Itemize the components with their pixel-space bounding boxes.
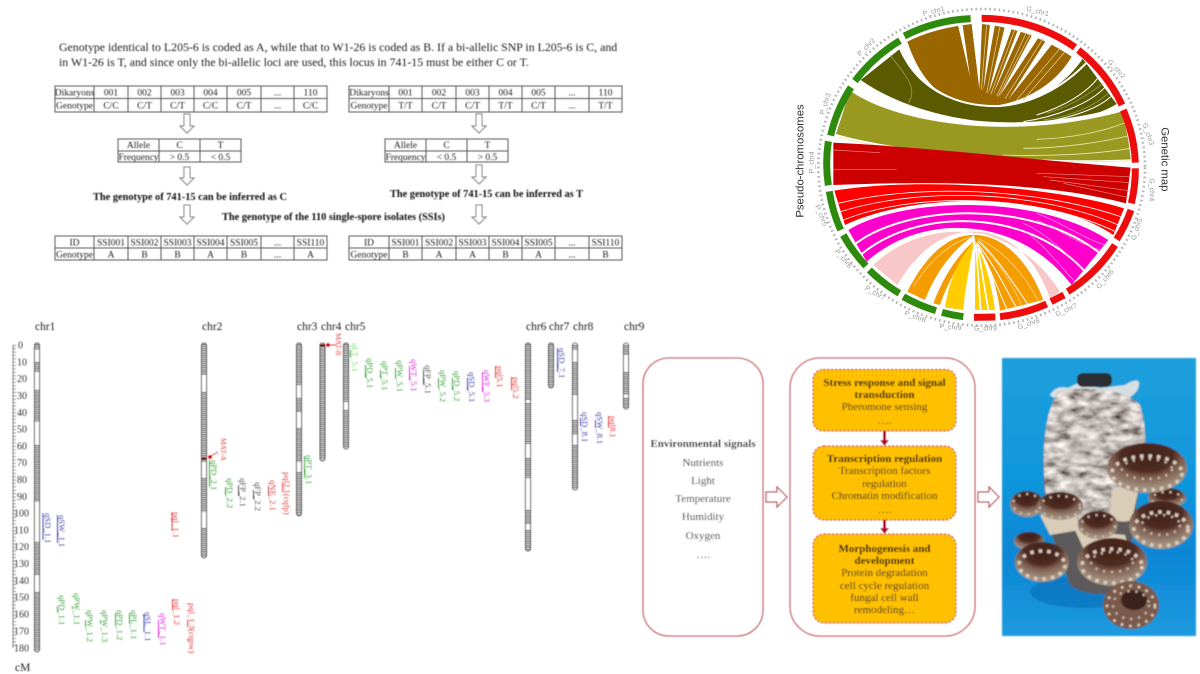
QTL labels: chr5 — [350, 343, 521, 402]
arrow: left step 2 — [180, 167, 194, 185]
arrow: right step 2 — [472, 165, 486, 184]
table: left SSI genotypes: SSI001 — [97, 238, 125, 248]
labels: pseudo-chromosome names: P_chr1 — [922, 6, 945, 18]
table: right dikaryon genotypes: 005 — [531, 88, 546, 98]
QTL labels: chr5: qSD_5.1 — [467, 372, 477, 402]
table: left dikaryon genotypes: ... — [274, 88, 281, 98]
labels: genetic map names: G_chr7 — [1055, 303, 1079, 318]
photo: plastic wrap — [1050, 381, 1139, 402]
panel: environmental signals — [643, 358, 763, 636]
axis: centimorgan scale: 10 — [17, 358, 27, 368]
chromosome labels: chr1 — [35, 321, 56, 333]
table: left allele frequency: Frequency — [118, 153, 159, 163]
photo: floor shadow — [1030, 576, 1140, 608]
QTL labels: chr1 — [43, 512, 197, 653]
chromosome: chr1 — [34, 343, 40, 652]
table: right SSI genotypes: A — [469, 250, 476, 260]
table: right SSI genotypes: SSI004 — [492, 238, 520, 248]
table: left SSI genotypes: A — [307, 250, 314, 260]
QTL labels: chr7 to chr9: qSD_8.1 — [580, 412, 590, 442]
box: transcription regulation — [813, 446, 956, 520]
QTL labels: chr7 to chr9: qSW_8.1 — [595, 412, 605, 444]
table: left SSI genotypes: SSI005 — [230, 238, 258, 248]
table: right SSI genotypes: SSI110 — [592, 238, 620, 248]
panel: environmental signals: Temperature — [675, 493, 731, 505]
QTL labels: chr5: qPT_5.1 — [380, 361, 390, 390]
QTL labels: chr5: pql5.1 — [495, 366, 505, 388]
panel: regulation model — [643, 358, 999, 636]
chromosome labels — [35, 321, 645, 333]
table: left dikaryon genotypes: 005 — [237, 88, 251, 98]
ribbon: chr9 — [945, 243, 995, 310]
QTL labels: chr1: qPD_1.1 — [57, 595, 67, 625]
box: transcription regulation: …. — [878, 504, 892, 516]
ribbon: chr2 — [861, 49, 1117, 127]
photo: large mushroom left — [1015, 542, 1069, 582]
heading: left inference: The genotype of 741-15 can be inferred as C — [93, 192, 287, 203]
axis: centimorgan scale: 150 — [14, 592, 29, 604]
QTL labels: chr1: qPW_1.1 — [72, 593, 82, 625]
box: morphogenesis: cell cycle regulation — [840, 580, 930, 592]
QTL labels: chr1: qSW_1.1 — [57, 515, 67, 547]
chromosome labels: chr8 — [573, 321, 594, 333]
arrow: left step 3 — [180, 205, 194, 224]
table: left dikaryon genotypes: Dikaryons — [55, 88, 95, 98]
QTL labels: chr2 and chr3: qNE_2.1 — [268, 480, 278, 511]
arrow: left step 1 — [180, 114, 194, 133]
table: right dikaryon genotypes: ... — [568, 102, 576, 112]
chromosome: chr5 — [344, 343, 348, 449]
intro text: Genotype identical to L205-6 is coded as A, while that to W1-26 is coded as B. If a bi-allelic SNP in L205-6 is C, and — [59, 40, 617, 54]
chromosome: chr7 — [548, 343, 554, 388]
table: right SSI genotypes: SSI001 — [392, 238, 420, 248]
chart: QTL linkage map — [13, 321, 645, 674]
chromosome labels: chr3 — [297, 321, 318, 333]
ribbon: chr4 — [833, 143, 1131, 203]
axis: centimorgan scale: 0 — [18, 340, 23, 352]
labels: pseudo-chromosome names: P_chr9 — [939, 323, 962, 332]
axis: centimorgan scale: 100 — [14, 508, 29, 520]
table: left dikaryon genotypes: C/C — [103, 102, 119, 112]
QTL labels: chr5: qLT_5.1 — [350, 343, 360, 372]
axis: centimorgan scale: 90 — [17, 492, 27, 503]
chromosome labels: chr4 — [321, 321, 342, 333]
table: left allele frequency: Allele — [127, 141, 150, 151]
labels: pseudo-chromosome names: P_chr5 — [813, 204, 828, 227]
QTL labels: chr1: pql_1.1 — [171, 512, 181, 538]
chart: circos plot of pseudo-chromosomes and genetic map — [794, 6, 1170, 333]
QTL labels: chr2 and chr3: qPT_3.1 — [304, 455, 314, 484]
table: right SSI genotypes: B — [602, 250, 609, 260]
axis: centimorgan scale: 80 — [17, 475, 27, 486]
axis label: pseudo-chromosomes: Pseudo-chromosomes — [794, 104, 806, 218]
photo: substrate bag — [1043, 389, 1145, 594]
box: morphogenesis: Morphogenesis and — [838, 543, 930, 555]
labels: genetic map names: G_chr2 — [1106, 59, 1126, 80]
QTL labels: chr5: qWF_5.3 — [482, 370, 492, 402]
box: stress response — [813, 370, 956, 431]
axis: centimorgan scale: 160 — [14, 610, 29, 620]
QTL labels: chr7 to chr9: pql8.1 — [608, 416, 618, 438]
QTL labels: chr2 and chr3: MAT-B — [334, 333, 343, 356]
box: transcription regulation: Transcription factors — [839, 465, 930, 477]
QTL labels: chr1: qPL_1.1 — [129, 610, 139, 639]
ring: tick marks — [818, 9, 1145, 326]
table: right SSI genotypes — [349, 236, 622, 260]
arrow: right step 3 — [472, 205, 486, 224]
table: right dikaryon genotypes: T/T — [598, 102, 613, 112]
table: right SSI genotypes: B — [402, 250, 409, 260]
table: left allele frequency: < 0.5 — [211, 153, 231, 163]
QTL labels: chr5: qPW_5.2 — [438, 370, 448, 402]
table: right SSI genotypes: ID — [364, 238, 374, 248]
table: right SSI genotypes: SSI003 — [459, 238, 487, 248]
table: right allele frequency: > 0.5 — [478, 153, 498, 163]
QTL labels: chr5: qFP_5.1 — [423, 365, 433, 394]
panel: environmental signals: Environmental signals — [650, 438, 756, 450]
table: left SSI genotypes: A — [207, 250, 214, 260]
arrow: transcription to morphogenesis — [880, 520, 889, 534]
photo: large mushroom right — [1129, 501, 1193, 549]
QTL labels: chr2 and chr3 — [208, 333, 343, 515]
QTL labels: chr5: pql5.2 — [511, 377, 521, 399]
chromosome labels: chr5 — [345, 321, 366, 333]
intro text — [59, 40, 617, 69]
table: right dikaryon genotypes: C/T — [465, 102, 480, 112]
labels: pseudo-chromosome names: P_chr3 — [819, 92, 833, 116]
panel: regulation cascade — [790, 358, 975, 636]
photo: mushroom stems — [1040, 485, 1138, 552]
chromosome: chr4 — [320, 343, 325, 461]
labels: pseudo-chromosome names: P_chr7 — [863, 285, 886, 302]
labels: pseudo-chromosome names — [809, 6, 962, 332]
arrow: regulation to fruiting body — [978, 487, 999, 507]
table: left dikaryon genotypes: 002 — [137, 88, 152, 98]
table: left SSI genotypes — [55, 236, 327, 260]
axis: centimorgan scale: 50 — [17, 424, 27, 436]
table: right SSI genotypes: SSI005 — [525, 238, 553, 248]
heading: right inference: The genotype of 741-15 can be inferred as T — [390, 189, 583, 200]
QTL labels: chr5: qPW_5.1 — [395, 360, 405, 392]
panel: genotype inference workflow — [55, 40, 622, 260]
table: left dikaryon genotypes: C/T — [170, 102, 185, 112]
ribbon: chr6 — [848, 205, 1108, 285]
axis: centimorgan scale: 170 — [14, 626, 29, 638]
table: right SSI genotypes: ... — [568, 250, 576, 260]
table: left allele frequency — [118, 139, 241, 163]
table: right dikaryon genotypes: 003 — [465, 88, 480, 98]
QTL labels: chr2 and chr3: qPD_2.1 — [209, 460, 219, 490]
table: right allele frequency: C — [443, 141, 450, 151]
chromosome: chr3 — [296, 343, 302, 516]
labels: pseudo-chromosome names: P_chr8 — [903, 310, 927, 324]
table: left SSI genotypes: SSI004 — [197, 238, 225, 248]
table: right allele frequency — [385, 139, 508, 163]
chromosome: chr2 — [202, 343, 206, 558]
table: right dikaryon genotypes: C/T — [432, 102, 447, 112]
arrow: signals to regulation — [766, 487, 787, 507]
QTL labels: chr5: qPD_5.2 — [452, 371, 462, 401]
arrow: stress to transcription — [880, 431, 889, 446]
labels: genetic map names: G_chr5 — [1131, 217, 1144, 241]
table: right SSI genotypes: A — [535, 250, 542, 260]
chromosome labels: chr7 — [549, 321, 570, 333]
table: left SSI genotypes: B — [174, 250, 181, 260]
ribbon: chr1 — [907, 23, 1072, 107]
photo: bottom mushroom — [1103, 581, 1159, 629]
labels: genetic map names: G_chr3 — [1141, 122, 1155, 147]
ribbon: chr7 — [873, 232, 1060, 298]
table: left dikaryon genotypes: 001 — [104, 88, 118, 98]
table: right SSI genotypes: Genotype — [351, 250, 387, 260]
table: right allele frequency: T — [485, 141, 491, 151]
QTL labels: chr5: qWT_5.1 — [409, 359, 419, 392]
table: left dikaryon genotypes: C/T — [237, 102, 252, 112]
QTL labels: chr1: qSL_1.1 — [143, 612, 153, 641]
ribbon: chr3 — [836, 85, 1131, 162]
table: left dikaryon genotypes: 004 — [203, 88, 218, 98]
axis: centimorgan scale: 110 — [14, 526, 29, 536]
box: morphogenesis: fungal cell wall — [850, 592, 919, 604]
labels: pseudo-chromosome names: P_chr6 — [833, 248, 853, 270]
table: right dikaryon genotypes: Dikaryons — [349, 88, 389, 98]
labels: genetic map names: G_chr1 — [1026, 6, 1050, 18]
table: left dikaryon genotypes: 003 — [170, 88, 185, 98]
box: stress response: …. — [878, 415, 892, 427]
QTL labels: chr2 and chr3: MAT-A — [219, 438, 228, 462]
table: left SSI genotypes: SSI110 — [297, 238, 325, 248]
table: right allele frequency: Allele — [394, 141, 417, 151]
ring: pseudo-chromosome segments — [827, 19, 971, 317]
table: left SSI genotypes: B — [141, 250, 148, 260]
table: left dikaryon genotypes: 110 — [304, 88, 318, 98]
panel: environmental signals: Nutrients — [683, 457, 723, 469]
box: transcription regulation: Transcription regulation — [827, 453, 942, 465]
chromosome: chr8 — [572, 343, 578, 490]
labels: pseudo-chromosome names: P_chr2 — [856, 37, 877, 58]
photo: shiitake mushrooms on substrate bag — [1002, 358, 1196, 636]
QTL labels: chr1: pql_1.2 — [172, 599, 182, 625]
table: right dikaryon genotypes: 002 — [432, 88, 446, 98]
table: left SSI genotypes: ... — [274, 250, 281, 260]
QTL labels: chr1: qWT_1.1 — [158, 613, 168, 646]
table: right dikaryon genotypes: T/T — [498, 102, 513, 112]
table: left dikaryon genotypes: ... — [274, 102, 281, 112]
panel: environmental signals: Humidity — [682, 511, 725, 523]
axis: centimorgan scale: 140 — [14, 576, 29, 587]
axis: centimorgan scale: 30 — [17, 391, 27, 402]
QTL labels: chr1: qSD_1.1 — [43, 513, 53, 543]
labels: genetic map names: G_chr8 — [1017, 317, 1041, 331]
axis: centimorgan scale: 40 — [17, 408, 27, 419]
photo: large mushroom top right — [1107, 443, 1187, 493]
intro text: in W1-26 is T, and since only the bi-allelic loci are used, this locus in 741-15 must be either C or T. — [59, 55, 529, 69]
box: morphogenesis: development — [855, 555, 915, 567]
table: right dikaryon genotypes: ... — [568, 88, 576, 98]
table: left allele frequency: C — [176, 141, 183, 151]
chromosome: chr6 — [526, 343, 530, 551]
QTL labels: chr1: qPW_1.3 — [100, 610, 110, 642]
box: transcription regulation: regulation — [862, 478, 907, 490]
QTL labels: chr5: qPD_5.1 — [365, 358, 375, 388]
box: transcription regulation: Chromatin modification — [831, 490, 938, 502]
box: morphogenesis — [813, 534, 956, 623]
table: left allele frequency: T — [218, 141, 224, 151]
table: right dikaryon genotypes: 110 — [599, 88, 613, 98]
QTL labels: chr1: qPW_1.2 — [85, 610, 95, 642]
table: left dikaryon genotypes: C/T — [137, 102, 152, 112]
table: right SSI genotypes: A — [436, 250, 443, 260]
axis: centimorgan scale: 60 — [17, 442, 27, 452]
table: right SSI genotypes: ... — [568, 238, 576, 248]
table: left dikaryon genotypes: C/C — [203, 102, 218, 112]
chromosome: chr9 — [624, 343, 628, 409]
axis: centimorgan scale: cM — [15, 662, 30, 674]
table: right allele frequency: < 0.5 — [437, 153, 457, 163]
table: left SSI genotypes: Genotype — [56, 250, 93, 260]
labels: genetic map names: G_chr6 — [1095, 268, 1116, 291]
table: left dikaryon genotypes: Genotype — [56, 102, 93, 112]
axis label: genetic map: Genetic map — [1158, 127, 1170, 191]
table: left SSI genotypes: ID — [69, 238, 80, 248]
photo: back mushroom caps — [1010, 488, 1186, 550]
QTL labels: chr2 and chr3: qPD_2.2 — [225, 478, 235, 508]
QTL labels: chr2 and chr3: qFP_2.1 — [238, 478, 248, 507]
panel: environmental signals: …. — [696, 549, 710, 561]
QTL labels: chr2 and chr3: qFP_2.2 — [253, 482, 263, 511]
chromosome labels: chr9 — [624, 321, 645, 333]
table: left dikaryon genotypes — [55, 86, 327, 112]
table: left SSI genotypes: B — [241, 250, 247, 260]
box: stress response: Stress response and signal — [823, 377, 946, 389]
arrow: right step 1 — [472, 114, 486, 133]
table: left allele frequency: > 0.5 — [170, 153, 190, 163]
ribbon: chr5 — [834, 184, 1124, 235]
QTL labels: chr7 to chr9: qSD_7.1 — [557, 348, 567, 378]
table: left dikaryon genotypes: C/C — [303, 102, 318, 112]
ring: genetic map segments — [974, 18, 1135, 317]
axis: centimorgan scale: 120 — [14, 542, 29, 553]
table: right SSI genotypes: SSI002 — [425, 238, 453, 248]
table: left SSI genotypes: SSI003 — [164, 238, 192, 248]
axis: centimorgan scale: 70 — [17, 458, 27, 469]
table: right dikaryon genotypes: C/T — [531, 102, 546, 112]
table: left SSI genotypes: ... — [274, 238, 281, 248]
table: right dikaryon genotypes: 001 — [398, 88, 413, 98]
panel: environmental signals: Light — [691, 475, 715, 487]
labels: genetic map names: G_chr4 — [1147, 178, 1154, 201]
labels: genetic map names: G_chr9 — [974, 326, 997, 333]
QTL labels: chr1: pql_1.3(cqpw) — [187, 603, 197, 653]
ribbon: chr8 — [907, 234, 1043, 311]
table: right SSI genotypes: B — [502, 250, 509, 260]
QTL labels: chr2 and chr3: pql2.1(cqfp) — [282, 472, 292, 515]
table: left SSI genotypes: SSI002 — [131, 238, 159, 248]
table: right dikaryon genotypes: Genotype — [351, 102, 387, 112]
table: right dikaryon genotypes: T/T — [398, 102, 413, 112]
axis: centimorgan scale: 180 — [14, 644, 29, 654]
photo: large mushroom center — [1077, 538, 1147, 586]
heading: single-spore isolates: The genotype of the 110 single-spore isolates (SSIs) — [222, 212, 445, 223]
axis: centimorgan scale: 130 — [14, 559, 29, 570]
chromosome labels: chr6 — [526, 321, 547, 333]
axis: centimorgan scale: 20 — [17, 374, 27, 385]
panel: environmental signals: Oxygen — [686, 530, 721, 542]
table: right dikaryon genotypes: 004 — [498, 88, 513, 98]
box: morphogenesis: Protein degradation — [841, 567, 928, 579]
QTL labels: chr7 to chr9 — [557, 348, 618, 444]
QTL labels: chr1: qPD_1.2 — [115, 610, 125, 640]
axis: centimorgan scale — [13, 340, 30, 674]
labels: pseudo-chromosome names: P_chr4 — [809, 151, 816, 173]
table: right dikaryon genotypes — [349, 86, 622, 112]
box: stress response: transduction — [855, 389, 914, 401]
labels: genetic map names — [974, 6, 1155, 333]
box: stress response: Pheromone sensing — [842, 401, 928, 413]
photo: bag cap — [1077, 373, 1112, 387]
table: right allele frequency: Frequency — [385, 153, 426, 163]
table: left SSI genotypes: A — [108, 250, 115, 260]
box: morphogenesis: remodeling… — [854, 604, 915, 616]
chromosome labels: chr2 — [202, 321, 223, 333]
